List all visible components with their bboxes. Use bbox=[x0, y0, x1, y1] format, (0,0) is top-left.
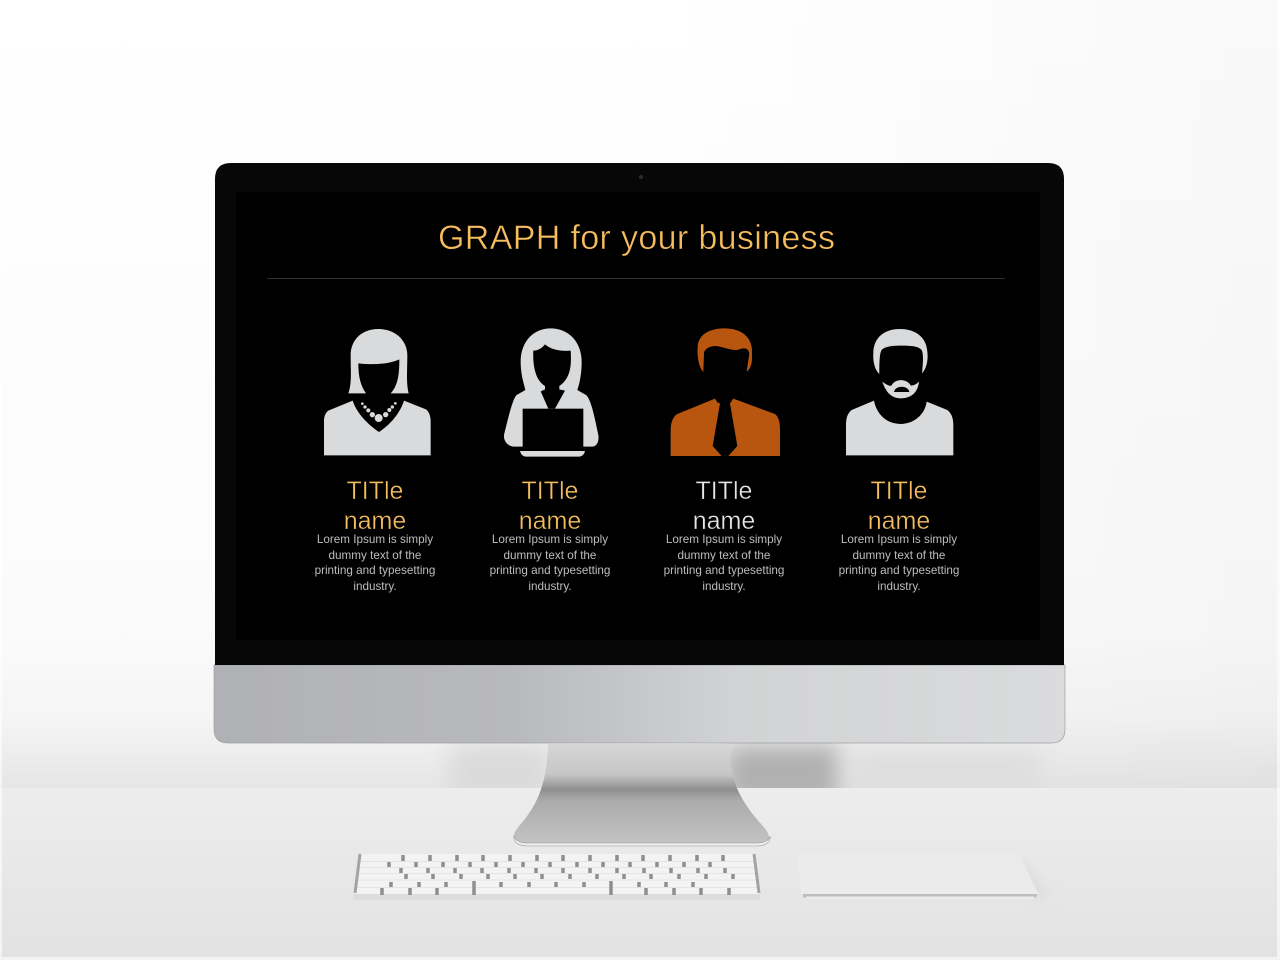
text block: column 4 bbox=[839, 477, 959, 593]
text block: column 1: Lorem Ipsum is simply bbox=[317, 533, 433, 546]
text block: column 4: name bbox=[868, 507, 930, 535]
text block: column 2: industry. bbox=[528, 580, 572, 593]
text block: column 1 bbox=[315, 477, 435, 593]
monitor bezel bbox=[215, 163, 1064, 665]
text block: column 1: dummy text of the bbox=[329, 549, 421, 562]
icon: woman with laptop bbox=[504, 328, 599, 457]
text block: column 3: printing and typesetting bbox=[664, 564, 784, 577]
text block: column 4: TITle bbox=[871, 477, 927, 505]
text block: column 3: TITle bbox=[696, 477, 752, 505]
text block: column 3: dummy text of the bbox=[678, 549, 770, 562]
text block: column 2: Lorem Ipsum is simply bbox=[492, 533, 608, 546]
webcam bbox=[639, 175, 643, 179]
icon: man with tie bbox=[671, 328, 780, 456]
text block: column 3: Lorem Ipsum is simply bbox=[666, 533, 782, 546]
text block: column 1: industry. bbox=[353, 580, 397, 593]
background: monitor shadow on wall bbox=[450, 744, 1028, 788]
text block: column 1: printing and typesetting bbox=[315, 564, 435, 577]
keyboard bbox=[353, 854, 760, 900]
text block: column 3 bbox=[664, 477, 784, 593]
text block: column 4: printing and typesetting bbox=[839, 564, 959, 577]
text block: column 1: TITle bbox=[347, 477, 403, 505]
icon: bearded man bbox=[846, 329, 953, 455]
text block: column 4: dummy text of the bbox=[853, 549, 945, 562]
text block: column 2: name bbox=[519, 507, 581, 535]
text block: column 2: printing and typesetting bbox=[490, 564, 610, 577]
monitor stand bbox=[514, 744, 770, 846]
slide title: GRAPH for your business bbox=[438, 219, 835, 257]
text block: column 2: dummy text of the bbox=[504, 549, 596, 562]
text block: column 2 bbox=[490, 477, 610, 593]
text block: column 3: industry. bbox=[702, 580, 746, 593]
trackpad bbox=[797, 853, 1048, 898]
background: desk bbox=[0, 788, 1280, 960]
text block: column 4: industry. bbox=[877, 580, 921, 593]
icon: woman with necklace bbox=[324, 329, 431, 455]
text block: column 3: name bbox=[693, 507, 755, 535]
slide screen bbox=[236, 192, 1040, 640]
monitor chin bbox=[214, 665, 1065, 743]
text block: column 4: Lorem Ipsum is simply bbox=[841, 533, 957, 546]
text block: column 2: TITle bbox=[522, 477, 578, 505]
text block: column 1: name bbox=[344, 507, 406, 535]
